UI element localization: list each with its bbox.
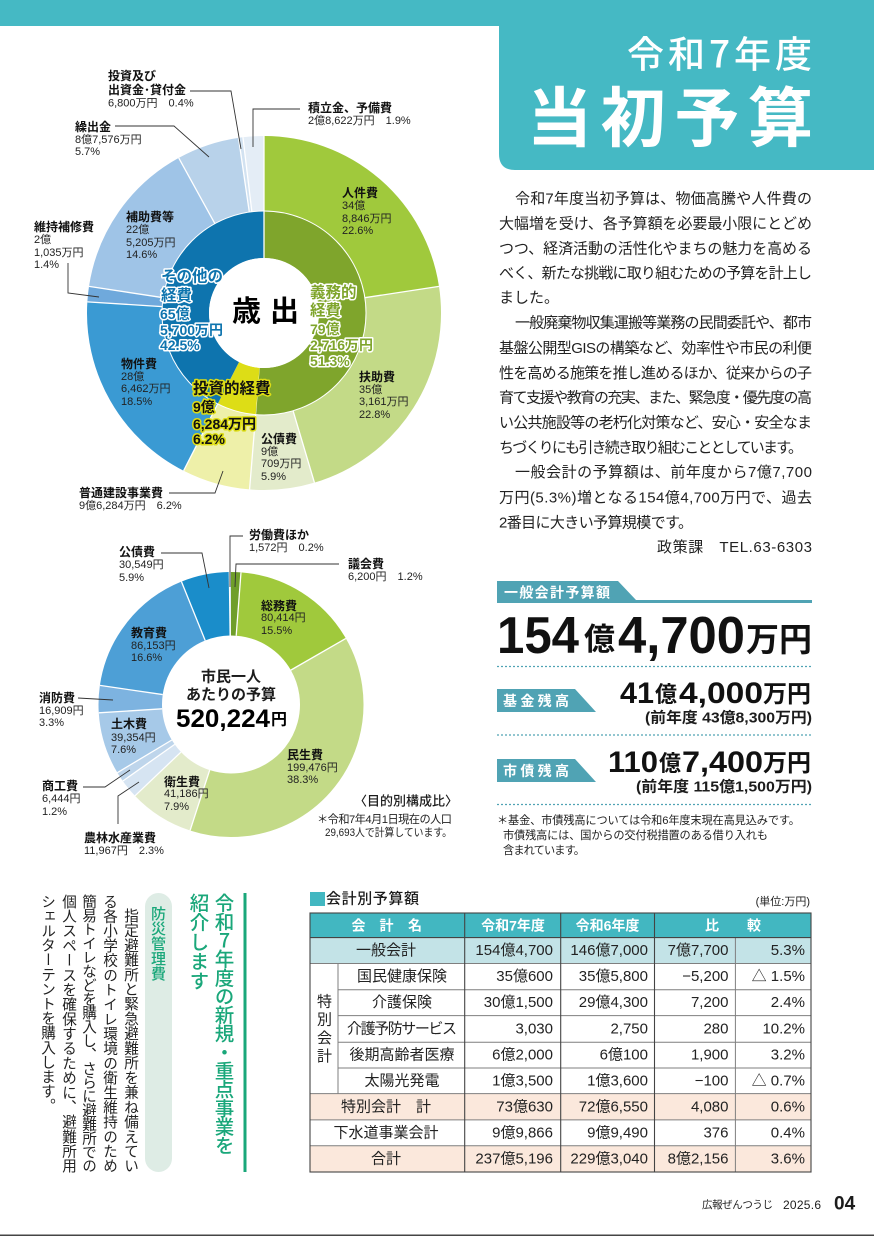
label: civil engineering: 39,354円 [111,732,156,744]
label: agriculture: 農林水産業費 [84,830,156,845]
label: labor: 労働費ほか [249,527,309,542]
label: education [131,625,176,664]
intro text block: 一般廃棄物収集運搬等業務の民間委託や、都市 [515,314,812,332]
label: other expenses: 42.5% [160,337,200,353]
label: reserves: 積立金、予備費 [308,100,392,115]
footnote: 市債残高には、国からの交付税措置のある借り入れも [503,828,768,842]
label: general affairs: 15.5% [261,625,292,637]
inner ring segments [158,207,370,419]
label: assembly [348,556,423,583]
table header row: 令和6年度 [576,918,639,934]
label: labor [249,527,324,554]
row header: special accounts: 特 [317,994,332,1010]
table header row: 名 [408,918,422,934]
pill: disaster prevention cost: 防災管理費 [148,906,169,982]
row header: special accounts: 会 [317,1030,332,1047]
center label: per citizen budget: 520,224 [176,705,270,733]
label: public debt: 5.9% [261,471,286,483]
intro text block: べく、新たな挑戦に取り組むための予算を計上し [499,264,812,282]
table heading: (単位:万円) [756,894,810,908]
center label: expenditure: 歳 [232,295,261,328]
row: general account [356,942,805,959]
row: national health insurance: 35億600 [496,968,553,985]
row: sewerage account: 376 [703,1124,728,1142]
label: goods: 6,462万円 [121,383,171,395]
intro text block: 2番目に大きい予算規模です。 [499,514,693,532]
row: late-stage elderly medical care: 後期高齢者医療 [349,1046,455,1064]
label: public debt [119,544,164,584]
row: preventive care services: 2,750 [610,1020,648,1038]
label: sanitation: 7.9% [164,801,189,813]
figure: general account total: 億 [584,622,615,657]
chart note: 29,693人で計算しています。 [325,825,452,839]
label: public debt: 30,549円 [119,559,164,571]
intro text block: 性を高める施策を推し進めるほか、従来からの子 [499,365,812,382]
row: national health insurance: △ 1.5% [752,968,805,985]
intro text block: 大幅増を受け、各予算額を必要最小限にとどめ [499,214,812,232]
center label: per citizen budget: あたりの予算 [186,686,276,704]
row: late-stage elderly medical care: 3.2% [771,1046,805,1064]
label: reserves [308,100,411,127]
label: other expenses [160,268,223,353]
table header row: 較 [747,918,761,934]
center label: per citizen budget: 市民一人 [201,668,261,686]
row: national health insurance: 国民健康保険 [357,968,447,985]
label: other expenses: その他の [161,268,223,286]
tag: municipal bond balance [497,759,596,782]
label: assistance [359,369,409,421]
label: civil engineering [111,716,156,756]
chart note: ＊令和7年4月1日現在の人口 [317,812,452,826]
label: subsidies: 補助費等 [126,209,174,224]
figure: previous year bond balance: (前年度 115億1,500万円) [636,778,812,796]
donut chart: per citizen [39,527,458,857]
label: assistance: 3,161万円 [359,396,409,408]
label: fire [39,690,84,729]
row: grand total: 229億3,040 [570,1150,648,1168]
label: investment and loans: 投資及び [108,68,156,83]
vertical text block: る各小学校のトイレ環境の衛生維持のため [101,894,117,1173]
label: mandatory expenses: 79億 [310,321,340,337]
label: education: 教育費 [131,625,167,640]
footer: 04 [834,1194,856,1214]
label: maintenance: 維持補修費 [34,219,94,234]
figure: general account total: 万円 [746,621,812,658]
label: civil engineering: 土木費 [111,716,147,731]
tag: general account budget: 一般会計予算額 [504,584,610,600]
label: investment expenses: 投資的経費 [193,378,271,398]
label: public debt: 公債費 [119,544,155,559]
figure: municipal bond balance: 億 [659,751,681,776]
tag: municipal bond balance: 市債残高 [503,763,569,779]
label: labor: 1,572円 0.2% [249,542,324,554]
intro text block: 政策課 TEL.63-6303 [657,539,812,556]
label: sanitation: 41,186円 [164,788,209,800]
row: late-stage elderly medical care: 6億100 [600,1046,648,1064]
table heading [310,890,810,908]
label: other expenses: 65億 [160,306,190,322]
row: solar power: 1億3,500 [492,1072,553,1090]
row: sewerage account: 9億9,490 [587,1124,648,1142]
intro text block: 育て支援や教育の充実、また、緊急度・優先度の高 [499,390,812,406]
row: special accounts total: 特別会計 計 [341,1098,431,1116]
intro text block: 令和7年度当初予算は、物価高騰や人件費の [515,190,812,208]
center label: per citizen budget [176,668,287,733]
figure: fund balance: 4,000 [679,677,763,710]
label: mandatory expenses: 51.3% [310,353,350,369]
label: assembly: 議会費 [348,556,384,571]
label: subsidies: 22億 [126,223,149,236]
intro text block: ちづくりにも引き続き取り組むこととしています。 [499,440,803,456]
vertical rule [244,893,246,1172]
label: fire: 消防費 [39,690,75,705]
tag: fund balance [497,689,596,712]
label: subsidies: 5,205万円 [126,237,176,249]
table header row: 比 [705,918,719,934]
row: sewerage account: 下水道事業会計 [333,1124,439,1142]
footer: 広報ぜんつうじ [702,1199,773,1211]
row: special accounts total: 4,080 [691,1098,728,1116]
row: preventive care services: 280 [703,1020,728,1038]
label: mandatory expenses: 義務的 [310,282,357,302]
intro text block: 一般会計の予算額は、前年度から7億7,700 [515,463,812,481]
row: long-term care insurance: 29億4,300 [579,994,648,1011]
label: welfare: 38.3% [287,774,318,786]
label: goods: 28億 [121,370,144,383]
label: investment expenses: 9億 [193,399,215,415]
label: goods [121,356,171,408]
label: maintenance: 2億 [34,233,51,246]
top band [0,0,874,26]
footnote [497,813,800,857]
row: national health insurance [357,968,805,985]
intro text block: 基盤公開型GISの構築など、効率性や市民の利便 [499,339,812,357]
row: grand total [371,1150,805,1168]
vertical text block [39,894,138,1174]
label: subsidies [126,209,176,261]
figure: general account total: 4,700 [618,607,745,665]
row header: special accounts [317,994,332,1065]
center label: expenditure: 出 [270,295,299,328]
label: general affairs [261,598,306,637]
figure: general account total: 154 [497,607,579,665]
row: general account: 146億7,000 [570,942,648,959]
vertical heading: 紹介します [185,893,214,990]
label: investment and loans [108,68,194,110]
row: grand total: 8億2,156 [668,1150,728,1168]
chart caption: 〈目的別構成比〉 [354,790,458,810]
label: investment expenses [193,378,271,447]
table header row: 会 [352,918,366,934]
label: goods: 物件費 [121,356,157,371]
title: reiwa 7: 令和7年度 [627,24,812,78]
footer: 2025.6 [783,1198,821,1212]
label: general affairs: 総務費 [261,598,297,613]
label: personnel [342,185,392,237]
label: public debt: 5.9% [119,572,144,584]
label: subsidies: 14.6% [126,249,157,261]
table header row [352,918,761,934]
footnote: 含まれています。 [503,844,585,857]
label: other expenses: 5,700万円 [160,322,223,338]
row header: special accounts: 別 [317,1012,332,1028]
row: preventive care services: 3,030 [515,1020,553,1038]
label: assembly: 6,200円 1.2% [348,571,423,583]
footnote: ＊基金、市債残高については令和6年度末現在高見込みです。 [497,813,800,827]
row: special accounts total: 0.6% [771,1098,805,1116]
vertical text block: 指定避難所と緊急避難所を兼ね備えてい [122,908,138,1173]
leader lines [68,91,300,493]
row: grand total: 3.6% [771,1150,805,1168]
row header: special accounts: 計 [317,1048,332,1065]
label: mandatory expenses: 経費 [310,302,341,320]
intro text block [499,190,812,556]
row: long-term care insurance: 2.4% [771,994,805,1011]
label: transfers [75,119,142,158]
row: grand total: 合計 [371,1150,401,1168]
table: budget by account [310,913,811,1172]
label: commerce: 1.2% [42,806,67,818]
table header row: 令和7年度 [481,918,545,934]
label: maintenance [34,219,94,271]
label: welfare: 199,476円 [287,762,338,774]
label: civil engineering: 7.6% [111,744,136,756]
row: national health insurance: −5,200 [682,968,728,985]
label: public debt: 9億 [261,445,278,458]
intro text block: ました。 [499,290,559,306]
title panel [499,0,874,170]
row: sewerage account: 0.4% [771,1124,805,1142]
row: preventive care services: 介護予防サービス [347,1020,457,1038]
tag: fund balance: 基金残高 [503,693,569,709]
row: sewerage account: 9億9,866 [492,1124,553,1142]
figure: municipal bond balance: 万円 [763,750,811,777]
label: mandatory expenses [310,282,373,369]
label: transfers: 8億7,576万円 [75,133,142,146]
label: public debt: 公債費 [261,431,297,446]
label: ordinary construction: 9億6,284万円 6.2% [79,499,182,512]
intro text block: つつ、経済活動の活性化やまちの魅力を高める [499,240,812,258]
label: investment and loans: 6,800万円 0.4% [108,98,194,110]
label: assistance: 22.8% [359,409,390,421]
row: solar power: 1億3,600 [587,1072,648,1090]
row: solar power: −100 [695,1072,728,1090]
row: grand total: 237億5,196 [475,1150,553,1168]
label: commerce [42,778,81,818]
label: mandatory expenses: 2,716万円 [310,337,373,353]
label: fire: 3.3% [39,717,64,729]
row: late-stage elderly medical care [349,1046,805,1064]
label: ordinary construction [79,485,182,512]
intro text block: 万円(5.3%)増となる154億4,700万円で、過去 [499,490,812,506]
label: agriculture: 11,967円 2.3% [84,845,164,857]
label: personnel: 34億 [342,199,365,212]
row: special accounts total [341,1098,805,1116]
label: public debt [261,431,301,483]
leader lines [78,536,339,824]
row: long-term care insurance [372,994,805,1011]
intro text block: い公共施設等の老朽化対策など、安心・安全なま [499,414,812,432]
vertical text block: 簡易トイレなどを購入し、さらに避難所での [80,894,96,1173]
vertical text block: 個人スペースを確保するために、避難所用 [60,894,76,1174]
vertical heading [185,893,239,1155]
figure: general account total [497,607,812,665]
label: transfers: 繰出金 [75,119,111,134]
label: reserves: 2億8,622万円 1.9% [308,114,411,127]
label: personnel: 22.6% [342,225,373,237]
label: agriculture [84,830,164,857]
label: investment expenses: 6,284万円 [193,416,256,432]
label: investment expenses: 6.2% [193,431,225,447]
figure: municipal bond balance: 7,400 [682,746,763,779]
label: general affairs: 80,414円 [261,612,306,624]
label: personnel: 8,846万円 [342,213,392,225]
label: transfers: 5.7% [75,146,100,158]
vertical text block: シェルターテントを購入します。 [39,894,55,1113]
row: solar power [364,1072,805,1090]
pill: disaster prevention cost [145,893,172,1172]
tag: general account budget [497,581,812,603]
label: welfare [287,747,338,786]
row: solar power: △ 0.7% [752,1072,805,1090]
label: education: 86,153円 [131,640,176,652]
chart note [317,812,452,839]
label: ordinary construction: 普通建設事業費 [79,485,163,500]
figure: fund balance: 万円 [763,681,811,708]
outer ring segments [75,124,453,502]
row: long-term care insurance: 介護保険 [372,994,432,1011]
figure: fund balance: 41 [620,677,654,710]
row: general account: 154億4,700 [475,942,553,959]
row: late-stage elderly medical care: 1,900 [691,1046,728,1064]
row: preventive care services: 10.2% [762,1020,805,1038]
label: public debt: 709万円 [261,458,301,470]
center label: expenditure [232,295,299,328]
label: commerce: 6,444円 [42,793,81,805]
label: education: 16.6% [131,652,162,664]
label: other expenses: 経費 [161,286,192,304]
figure: fund balance [620,677,811,710]
label: maintenance: 1.4% [34,259,59,271]
row: solar power: 太陽光発電 [364,1072,440,1090]
label: investment and loans: 出資金･貸付金 [108,82,186,97]
figure: fund balance: 億 [655,682,677,707]
label: maintenance: 1,035万円 [34,247,84,259]
row: late-stage elderly medical care: 6億2,000 [492,1046,553,1064]
row: long-term care insurance: 7,200 [691,994,728,1011]
row: preventive care services [347,1020,805,1038]
label: sanitation: 衛生費 [164,774,200,789]
row: sewerage account [333,1124,805,1142]
footer [702,1194,856,1214]
row: special accounts total: 73億630 [496,1098,553,1116]
label: goods: 18.5% [121,396,152,408]
figure: municipal bond balance: 110 [608,746,658,779]
label: fire: 16,909円 [39,705,84,717]
figure: municipal bond balance [608,746,811,779]
row: long-term care insurance: 30億1,500 [484,994,553,1011]
label: commerce: 商工費 [42,778,78,793]
table header row: 計 [380,918,394,934]
row: national health insurance: 35億5,800 [579,968,648,985]
label: welfare: 民生費 [287,747,323,762]
label: sanitation [164,774,209,813]
donut chart: expenditure [34,68,453,512]
label: assistance: 35億 [359,383,382,396]
row: special accounts total: 72億6,550 [579,1098,648,1116]
table heading: 会計別予算額 [326,890,419,908]
row: general account: 7億7,700 [668,942,728,959]
row: general account: 一般会計 [356,942,416,959]
row: general account: 5.3% [771,942,805,959]
label: assistance: 扶助費 [359,369,395,384]
title: initial budget: 当初予算 [527,66,813,160]
vertical heading: 令和7年度の新規・重点事業を [210,893,239,1155]
figure: previous year fund balance: (前年度 43億8,300万円) [645,708,812,726]
label: personnel: 人件費 [342,185,378,200]
center label: per citizen budget: 円 [271,712,287,728]
